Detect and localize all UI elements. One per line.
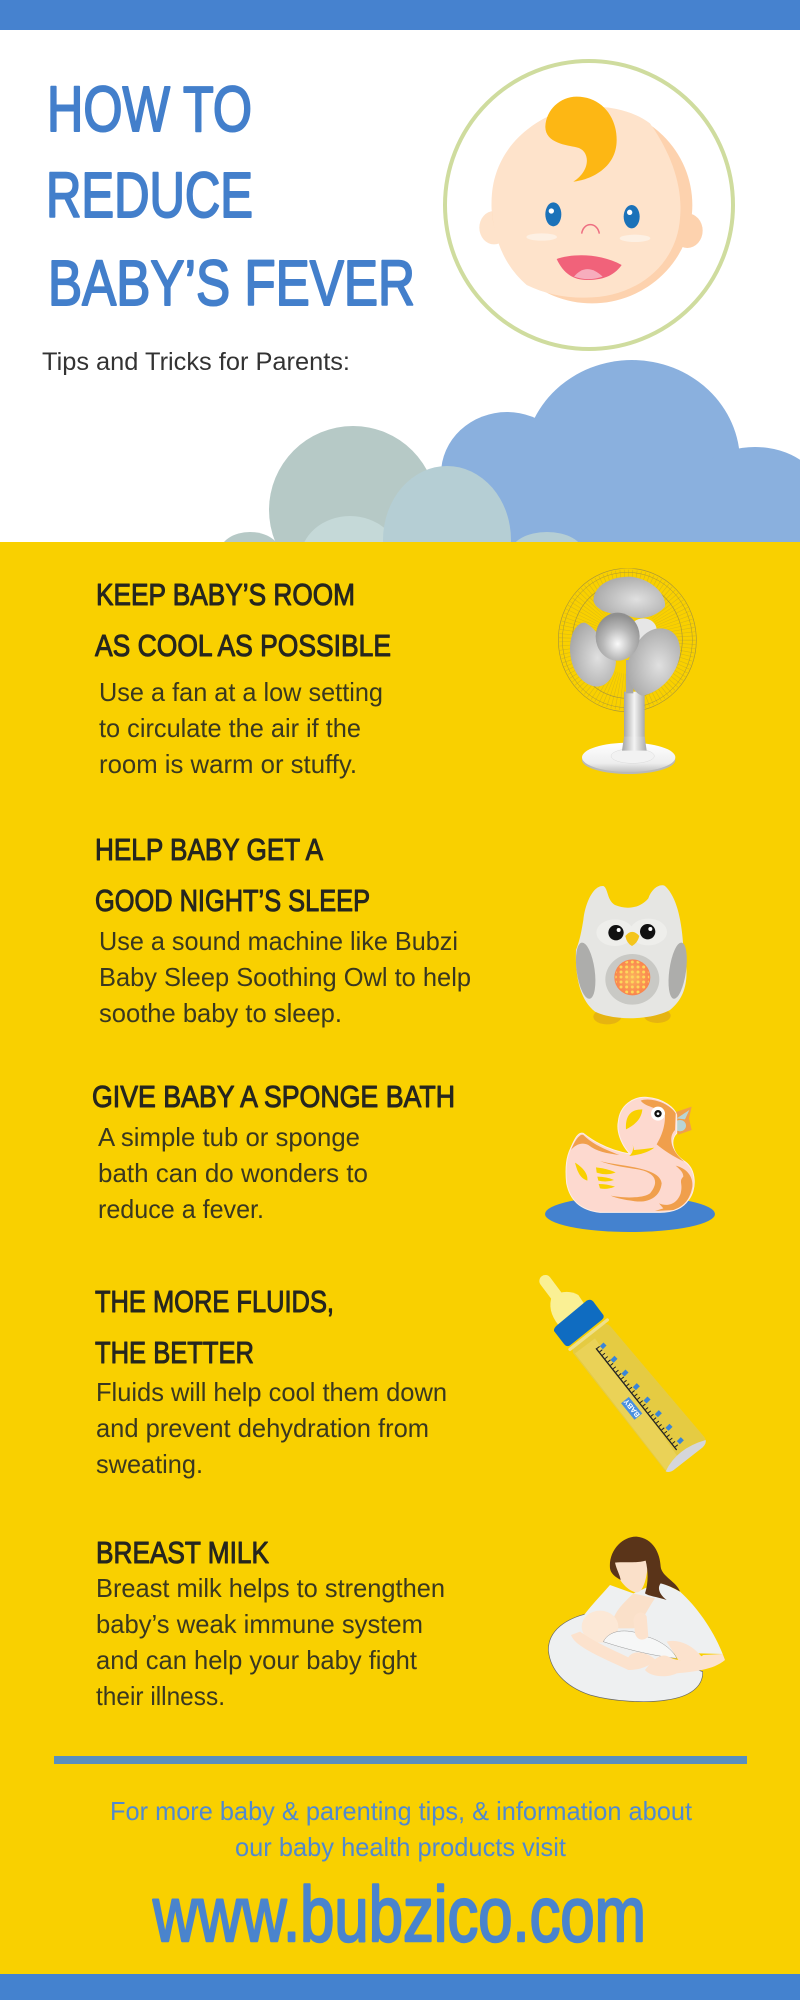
body text xyxy=(96,1377,447,1479)
icon: baby bottle xyxy=(545,1281,706,1472)
tip 4: more fluids xyxy=(95,1284,447,1479)
body text: reduce a fever. xyxy=(98,1194,264,1224)
body text xyxy=(96,1573,445,1711)
fan hub xyxy=(596,613,640,661)
mother face xyxy=(615,1557,648,1593)
baby nose xyxy=(582,225,599,234)
bottle cap xyxy=(554,1300,604,1346)
duck orange markings xyxy=(571,1099,692,1211)
small right lobe xyxy=(511,532,583,572)
baby blanket xyxy=(603,1631,677,1658)
heading xyxy=(95,1284,334,1370)
body text xyxy=(99,677,383,779)
teal cloud lobe xyxy=(383,466,511,614)
heading: GIVE BABY A SPONGE BATH xyxy=(92,1079,455,1114)
mother hair xyxy=(610,1537,680,1600)
mother left arm xyxy=(571,1632,655,1670)
body text: Fluids will help cool them down xyxy=(96,1377,447,1407)
heading: THE BETTER xyxy=(95,1335,254,1370)
owl beak xyxy=(625,932,639,946)
pale cloud lobe xyxy=(300,516,400,604)
body text: Breast milk helps to strengthen xyxy=(96,1573,445,1603)
body text: Baby Sleep Soothing Owl to help xyxy=(99,962,471,992)
heading: KEEP BABY’S ROOM xyxy=(96,577,355,612)
owl wings xyxy=(573,941,690,1000)
icon: electric fan xyxy=(558,568,696,774)
footer text: For more baby & parenting tips, & information about xyxy=(110,1796,693,1826)
top blue bar xyxy=(0,0,800,30)
body text: bath can do wonders to xyxy=(98,1158,368,1188)
fan base xyxy=(582,737,675,774)
body text: and can help your baby fight xyxy=(96,1645,418,1675)
mother chest xyxy=(612,1593,655,1628)
heading: HELP BABY GET A xyxy=(95,832,323,867)
bottle label: BABY xyxy=(622,1397,642,1419)
baby hair xyxy=(545,97,617,182)
clouds xyxy=(220,360,800,614)
mother right arm xyxy=(645,1654,725,1676)
fan guard xyxy=(558,568,696,712)
divider rule xyxy=(54,1756,747,1764)
footer text: our baby health products visit xyxy=(235,1832,567,1862)
bottle end xyxy=(666,1440,706,1472)
baby head xyxy=(492,107,692,303)
body text: A simple tub or sponge xyxy=(98,1122,360,1152)
heading: AS COOL AS POSSIBLE xyxy=(95,628,391,663)
water xyxy=(545,1196,715,1232)
baby head xyxy=(582,1611,618,1643)
heading: BREAST MILK xyxy=(96,1535,269,1570)
icon: mother nursing baby xyxy=(548,1537,725,1702)
baby eyes xyxy=(545,202,640,228)
title xyxy=(46,73,415,319)
bottle nipple xyxy=(545,1281,585,1325)
heading: THE MORE FLUIDS, xyxy=(95,1284,334,1319)
body text: soothe baby to sleep. xyxy=(99,998,342,1028)
title: BABY’S FEVER xyxy=(48,247,415,319)
owl speaker xyxy=(605,954,659,1005)
body text: room is warm or stuffy. xyxy=(99,749,357,779)
tip 2: good night's sleep xyxy=(95,832,471,1028)
bottle collar xyxy=(570,1320,607,1349)
body text: Use a sound machine like Bubzi xyxy=(99,926,458,956)
icon: baby face in circle xyxy=(445,61,733,349)
baby cheeks xyxy=(526,233,650,242)
duck eye xyxy=(651,1107,665,1121)
body text xyxy=(99,926,471,1028)
duck beak xyxy=(673,1107,692,1135)
nursing pillow xyxy=(548,1613,703,1702)
heading: GOOD NIGHT’S SLEEP xyxy=(95,883,370,918)
body text: to circulate the air if the xyxy=(99,713,361,743)
owl body xyxy=(576,885,687,1018)
duck body xyxy=(566,1097,694,1212)
tip 5: breast milk xyxy=(96,1535,445,1711)
small left lobe xyxy=(220,532,280,572)
baby mouth xyxy=(557,255,622,280)
owl eyes xyxy=(596,919,667,946)
body text: and prevent dehydration from xyxy=(96,1413,429,1443)
grey cloud lobe xyxy=(269,426,437,594)
heading xyxy=(95,832,370,918)
bottom blue bar xyxy=(0,1974,800,2000)
blue cloud xyxy=(441,360,800,564)
subtitle: Tips and Tricks for Parents: xyxy=(42,348,350,376)
website url: www.bubzico.com xyxy=(152,1870,646,1958)
body text: Use a fan at a low setting xyxy=(99,677,383,707)
icon: owl sound machine xyxy=(573,885,690,1024)
bottle body xyxy=(573,1324,706,1471)
body text xyxy=(98,1122,368,1224)
mother shirt xyxy=(572,1582,723,1654)
baby arm xyxy=(633,1613,648,1640)
tip 1: keep room cool xyxy=(95,577,391,779)
body text: sweating. xyxy=(96,1449,203,1479)
tip 3: sponge bath xyxy=(92,1079,455,1224)
baby leg xyxy=(667,1641,702,1661)
icon: rubber duck xyxy=(545,1097,715,1232)
heading xyxy=(95,577,391,663)
body text: baby’s weak immune system xyxy=(96,1609,423,1639)
footer text xyxy=(110,1796,693,1862)
owl feet xyxy=(593,1008,671,1024)
baby ears xyxy=(479,211,703,248)
fan stem xyxy=(624,660,645,750)
title: HOW TO xyxy=(47,73,252,145)
fan blades xyxy=(570,577,680,696)
yellow panel xyxy=(0,542,800,1974)
body text: their illness. xyxy=(96,1681,225,1711)
bottle highlight xyxy=(575,1338,680,1470)
bottle scale xyxy=(596,1344,682,1450)
duck yellow markings xyxy=(575,1109,654,1189)
title: REDUCE xyxy=(46,159,253,231)
